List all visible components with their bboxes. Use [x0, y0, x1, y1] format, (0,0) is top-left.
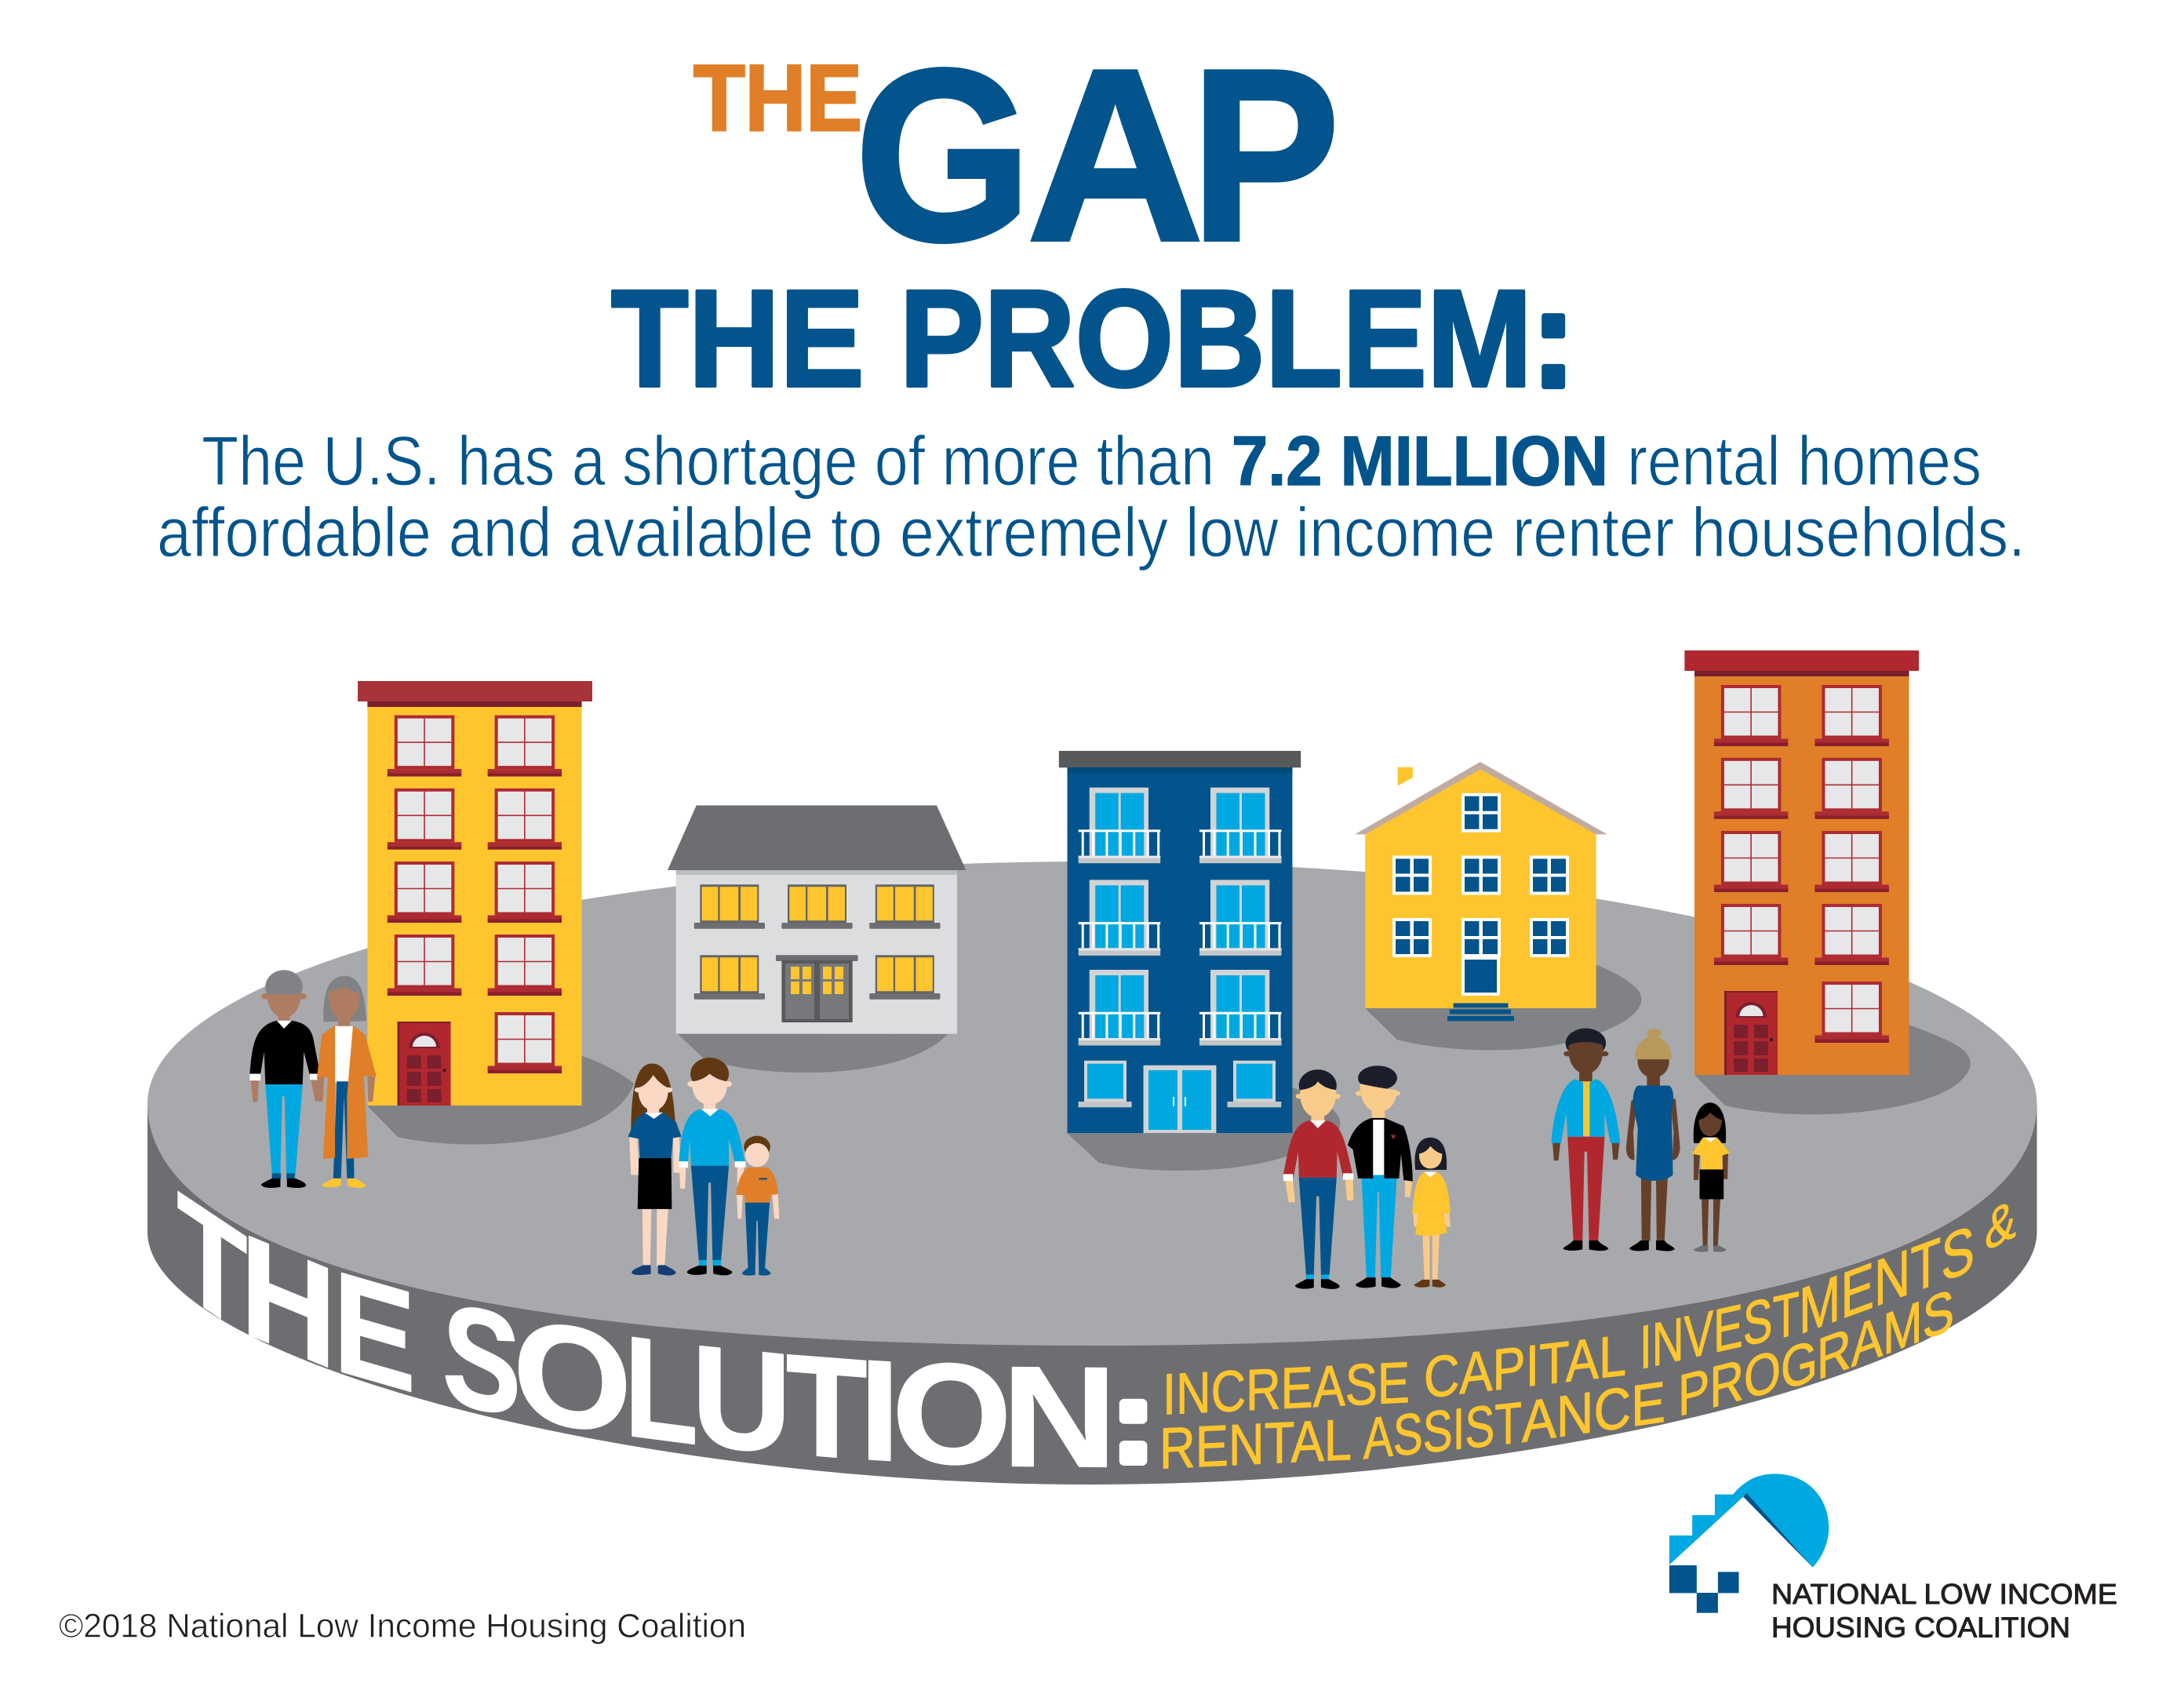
door — [1461, 957, 1500, 996]
solution heading on disk edge: E — [333, 1240, 416, 1423]
building: gray house — [668, 805, 966, 1034]
windows — [388, 716, 562, 1073]
detail line one: CAPITAL — [1424, 1323, 1626, 1411]
man in cyan jacket — [1551, 1029, 1620, 1251]
people: family with boy — [628, 1058, 779, 1276]
windows — [1392, 793, 1569, 957]
roof — [358, 681, 592, 701]
facade — [1694, 671, 1909, 1075]
solution heading on disk edge: O — [892, 1332, 1012, 1496]
solution heading on disk edge — [177, 1161, 1154, 1497]
building: orange apartment — [1684, 650, 1919, 1075]
solution heading on disk edge: I — [860, 1329, 900, 1492]
logo wordmark — [1771, 1578, 2117, 1644]
disk platform — [147, 862, 2037, 1485]
man in cyan sweater — [679, 1058, 746, 1275]
detail line two — [1159, 1277, 1954, 1481]
building shadows — [367, 964, 1971, 1171]
chimney flag — [1398, 767, 1413, 786]
detail line two: ANCE — [1522, 1369, 1665, 1455]
people: older couple — [249, 970, 377, 1188]
heading word: GAP: P — [1191, 19, 1340, 292]
detail line one: INVEST — [1640, 1278, 1800, 1383]
building: yellow apartment — [358, 681, 592, 1106]
building: blue apartment — [1059, 751, 1301, 1133]
solution heading on disk edge: L — [624, 1306, 698, 1474]
boy in orange shirt — [736, 1136, 779, 1276]
statement line one: rental homes — [1627, 421, 1982, 500]
door — [776, 955, 858, 1022]
man in black sweater — [249, 970, 321, 1188]
disk side — [147, 1103, 2037, 1485]
statement line one: 7.2 MILLION — [1232, 421, 1608, 500]
solution heading on disk edge: T — [177, 1161, 247, 1367]
windows — [1714, 685, 1889, 1043]
roof outline — [1355, 762, 1607, 834]
solution heading on disk edge: T — [786, 1325, 867, 1490]
people: family with girl in yellow — [1283, 1066, 1451, 1289]
copyright: ©2018 National Low Income Housing Coalition — [59, 1608, 746, 1645]
logo mark — [1669, 1474, 1829, 1613]
disk top — [147, 862, 2037, 1346]
detail line two: RAMS — [1817, 1277, 1954, 1393]
statement line one: The U.S. has a shortage of more than — [202, 421, 1214, 500]
heading word: GAP: A — [1027, 19, 1203, 292]
roof — [1059, 751, 1301, 767]
detail line one: INCREASE — [1163, 1350, 1410, 1427]
woman in navy top — [628, 1063, 682, 1276]
solution heading on disk edge: H — [240, 1202, 337, 1401]
facade — [367, 701, 582, 1106]
solution heading on disk edge: O — [513, 1288, 632, 1467]
people: family in blue and red — [1551, 1029, 1730, 1252]
detail line one: & — [1985, 1186, 2016, 1263]
detail line one — [1163, 1186, 2016, 1427]
man in black jacket — [1348, 1066, 1413, 1288]
balcony windows — [1079, 788, 1282, 1045]
solution heading on disk edge: N — [1002, 1336, 1117, 1497]
logo: national low income housing coalition — [1669, 1474, 2117, 1644]
windows — [694, 884, 941, 1000]
solution heading on disk edge: : — [1112, 1359, 1154, 1485]
heading word: THE: THE — [693, 46, 862, 151]
solution heading on disk edge: S — [442, 1272, 521, 1448]
problem statement text — [157, 421, 2026, 571]
girl in yellow top — [1692, 1102, 1730, 1252]
man in red sweater — [1283, 1069, 1353, 1289]
ground windows — [1079, 1061, 1281, 1107]
detail line one: MENTS — [1799, 1211, 1975, 1349]
roof — [668, 805, 966, 870]
title: the gap — [693, 18, 1340, 292]
facade — [676, 870, 957, 1034]
woman in orange cardigan — [317, 976, 377, 1188]
facade — [1067, 767, 1292, 1133]
detail line two: RENTAL — [1159, 1407, 1352, 1481]
facade — [1365, 769, 1596, 1008]
logo wordmark: NATIONAL LOW INCOME — [1771, 1578, 2117, 1610]
solution heading on disk edge: U — [692, 1316, 792, 1485]
roof — [1684, 650, 1919, 671]
woman in navy dress — [1626, 1029, 1680, 1251]
heading word: GAP — [855, 18, 1340, 292]
logo wordmark: HOUSING COALITION — [1771, 1612, 2070, 1644]
detail line two: PROG — [1678, 1328, 1818, 1429]
statement line one — [202, 421, 1982, 500]
heading: the problem: THE PROBLEM: — [611, 262, 1574, 416]
building: yellow house — [1355, 762, 1607, 1021]
detail line two: ASSIST — [1363, 1390, 1522, 1471]
solution detail text on disk edge — [1159, 1186, 2016, 1481]
door — [1144, 1066, 1216, 1133]
heading word: GAP: G — [855, 18, 1032, 292]
steps — [1447, 1003, 1514, 1021]
door — [1724, 991, 1778, 1075]
door — [398, 1022, 451, 1106]
girl in yellow dress — [1412, 1138, 1451, 1288]
